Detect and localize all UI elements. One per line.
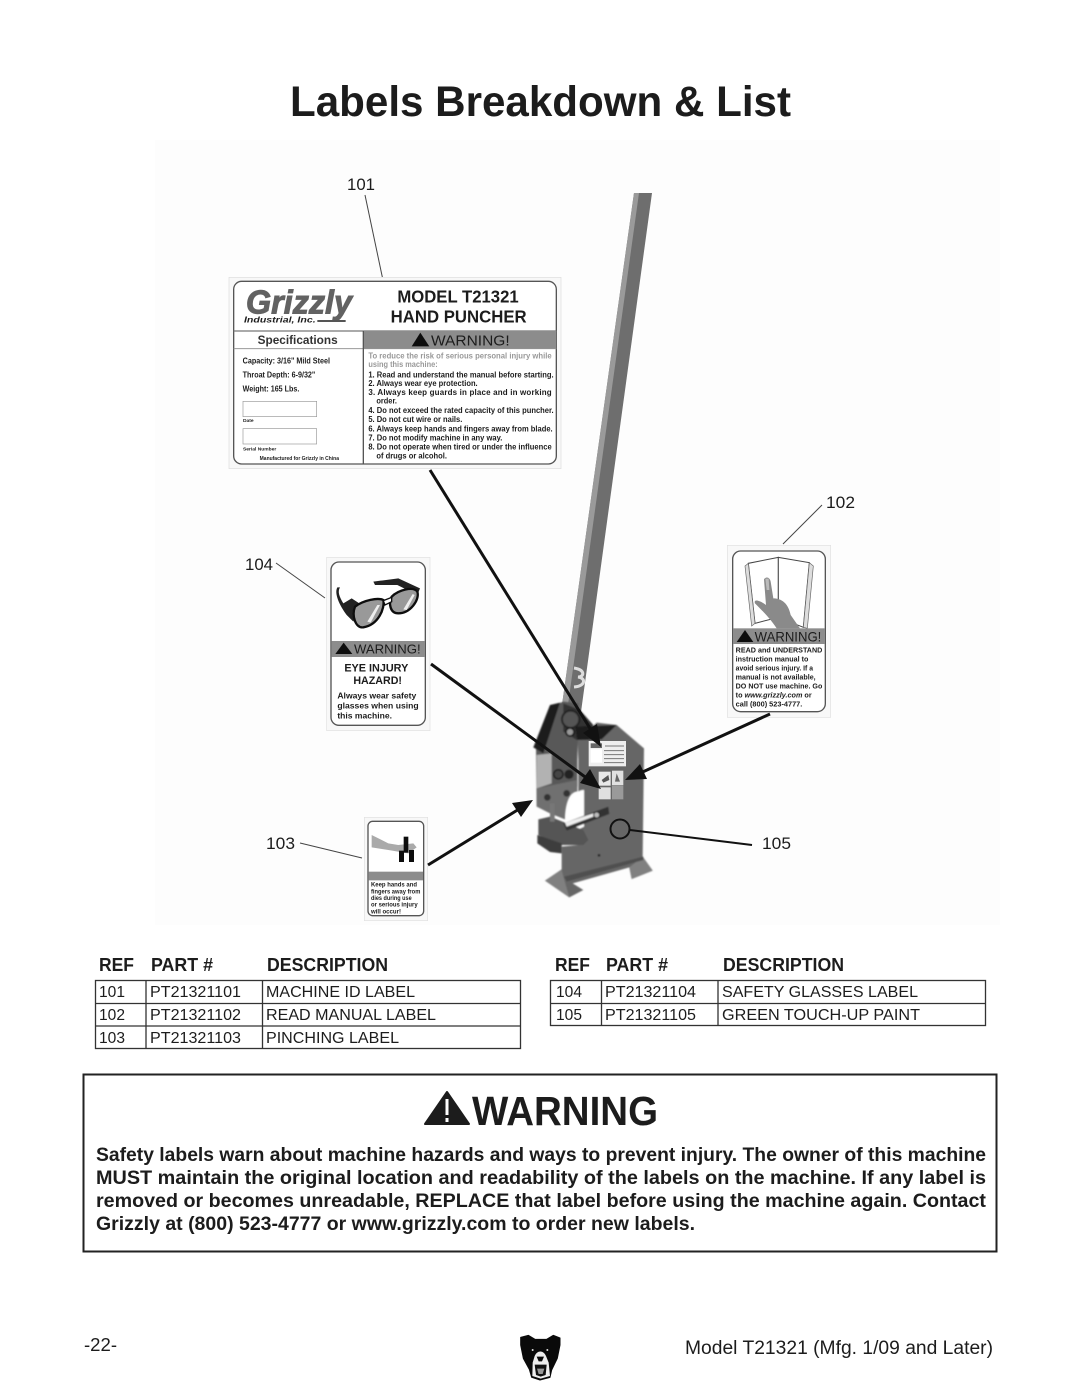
label 101: machine ID: 3. Always keep guards in place and in working xyxy=(368,388,552,397)
callout number 104: 104 xyxy=(245,555,273,574)
label 104: safety glasses: this machine. xyxy=(337,710,392,720)
punch machine photo xyxy=(533,193,653,897)
label 101: machine ID: To reduce the risk of serious personal injury while xyxy=(368,351,552,360)
callout 105: touch-up paint circle xyxy=(610,820,752,845)
warning message: removed or becomes unreadable, REPLACE that label before using the machine again. Contact xyxy=(96,1190,986,1212)
arrow: label 104 to machine xyxy=(431,664,601,789)
parts table: right: 105 xyxy=(556,1007,582,1024)
label 101: machine ID: 5. Do not cut wire or nails. xyxy=(368,415,462,424)
label 101: machine ID: Industrial, Inc. xyxy=(244,314,316,324)
label 104: safety glasses: HAZARD! xyxy=(353,675,402,687)
label 101: machine ID: 7. Do not modify machine in any way. xyxy=(368,433,502,442)
parts table: left: 101 xyxy=(99,984,125,1001)
parts table: left: 102 xyxy=(99,1007,125,1024)
label 102: read manual: manual is not available, xyxy=(736,672,816,681)
machine sticker cluster xyxy=(589,741,626,799)
throat opening xyxy=(565,790,584,833)
label 102: read manual: instruction manual to xyxy=(736,654,809,663)
label 101: machine ID: Serial Number xyxy=(243,446,277,451)
label 101: machine ID: Weight: 165 Lbs. xyxy=(243,385,299,394)
leader lines xyxy=(276,195,822,858)
label 102: read manual: DO NOT use machine. Go xyxy=(736,681,823,690)
label 102: read manual: avoid serious injury. If a xyxy=(736,663,814,672)
machine body xyxy=(545,723,653,897)
label 101: machine ID: Manufactured for Grizzly in China xyxy=(260,456,339,462)
handle xyxy=(561,193,652,712)
label 103: pinching: will occur! xyxy=(370,909,401,915)
label 101: machine ID: 2. Always wear eye protection. xyxy=(368,379,478,388)
label 101: machine ID: of drugs or alcohol. xyxy=(376,452,447,461)
label 104: safety glasses: EYE INJURY xyxy=(344,662,409,674)
parts table: left: PT21321102 xyxy=(150,1007,241,1024)
label 101: machine ID: Throat Depth: 6-9/32" xyxy=(243,370,316,379)
label 104: safety glasses xyxy=(327,557,430,731)
label 102: read manual: WARNING! xyxy=(755,629,821,644)
label 101: machine ID: 4. Do not exceed the rated capacity of this puncher. xyxy=(368,406,554,415)
label 103: pinching: dies during use xyxy=(371,896,412,902)
label 101: machine ID: HAND PUNCHER xyxy=(391,307,527,327)
arrow: label 103 to machine xyxy=(428,800,533,865)
parts table: right: SAFETY GLASSES LABEL xyxy=(722,984,918,1001)
parts table: left: MACHINE ID LABEL xyxy=(266,984,415,1001)
icon: warning triangle xyxy=(425,1092,469,1124)
ram and head xyxy=(536,702,578,807)
label 101: machine ID: 8. Do not operate when tired or under the influence xyxy=(368,443,552,452)
parts table: left: 103 xyxy=(99,1030,125,1047)
label 101: machine ID: order. xyxy=(376,397,397,406)
label 102: read manual: call (800) 523-4777. xyxy=(736,699,802,708)
icon: open book and pointing hand xyxy=(745,557,813,628)
parts table: right: PART # xyxy=(606,955,668,975)
callout number 101: 101 xyxy=(347,175,375,194)
callout number 102: 102 xyxy=(826,493,855,512)
label 101: machine ID: Specifications xyxy=(258,333,338,347)
parts table: right: PT21321104 xyxy=(605,984,696,1001)
arrow: label 101 to machine xyxy=(430,470,601,747)
label 101: machine ID: MODEL T21321 xyxy=(397,286,519,306)
label 101: machine ID: 6. Always keep hands and fingers away from blade. xyxy=(368,425,553,434)
title: Labels Breakdown & List xyxy=(290,79,791,126)
arrow: label 102 to machine xyxy=(625,714,770,780)
label 101: machine ID: Grizzly xyxy=(246,284,353,321)
label 101: machine ID: WARNING! xyxy=(431,334,510,350)
icon: grizzly bear logo xyxy=(521,1335,560,1380)
parts table: left: PART # xyxy=(151,955,213,975)
parts table: left: PT21321103 xyxy=(150,1030,241,1047)
page number: -22- xyxy=(84,1335,117,1355)
warning message xyxy=(96,1144,986,1235)
parts table: left: PINCHING LABEL xyxy=(266,1030,399,1047)
parts table: right xyxy=(550,955,986,1026)
parts table: left: READ MANUAL LABEL xyxy=(266,1007,436,1024)
label 104: safety glasses: glasses when using xyxy=(337,700,419,710)
callout number 103: 103 xyxy=(266,834,295,853)
label 102: read manual: READ and UNDERSTAND xyxy=(736,645,822,654)
icon: safety glasses xyxy=(336,578,420,627)
warning message: Safety labels warn about machine hazards and ways to prevent injury. The owner of this machine xyxy=(96,1144,986,1166)
parts table: left: DESCRIPTION xyxy=(267,955,388,975)
icon: hand between dies xyxy=(372,835,417,862)
label 101: machine ID: using this machine: xyxy=(368,360,438,369)
warning message: MUST maintain the original location and readability of the labels on the machine. If any label is xyxy=(96,1167,986,1189)
parts table: right: REF xyxy=(555,955,590,975)
parts table: left xyxy=(95,955,521,1048)
label 104: safety glasses: WARNING! xyxy=(354,642,421,657)
handle bolt xyxy=(574,668,584,687)
parts table: right: GREEN TOUCH-UP PAINT xyxy=(722,1007,920,1024)
parts table: right: PT21321105 xyxy=(605,1007,696,1024)
parts table: left: PT21321101 xyxy=(150,984,241,1001)
label 103: pinching xyxy=(364,817,428,921)
label 103: pinching: Keep hands and xyxy=(371,883,417,889)
die block xyxy=(538,817,588,845)
warning message: Grizzly at (800) 523-4777 or www.grizzly.com to order new labels. xyxy=(96,1213,695,1235)
parts table: right: DESCRIPTION xyxy=(723,955,844,975)
label 103: pinching: fingers away from xyxy=(371,889,420,895)
label 103: pinching: or serious injury xyxy=(371,903,418,909)
label 101: machine ID: Date xyxy=(243,418,254,423)
parts table: left: REF xyxy=(99,955,134,975)
label 101: machine ID: Capacity: 3/16" Mild Steel xyxy=(243,357,330,366)
label 102: read manual xyxy=(727,545,831,717)
label 101: machine ID xyxy=(229,277,561,469)
label 102: read manual: to www.grizzly.com or xyxy=(736,690,812,699)
parts table: right: 104 xyxy=(556,984,582,1001)
warning heading: WARNING xyxy=(472,1088,658,1134)
label 104: safety glasses: Always wear safety xyxy=(337,690,417,700)
label 101: machine ID: 1. Read and understand the manual before starting. xyxy=(368,370,554,379)
warning box xyxy=(84,1074,996,1252)
callout number 105: 105 xyxy=(762,834,791,853)
footer model text: Model T21321 (Mfg. 1/09 and Later) xyxy=(685,1338,993,1359)
